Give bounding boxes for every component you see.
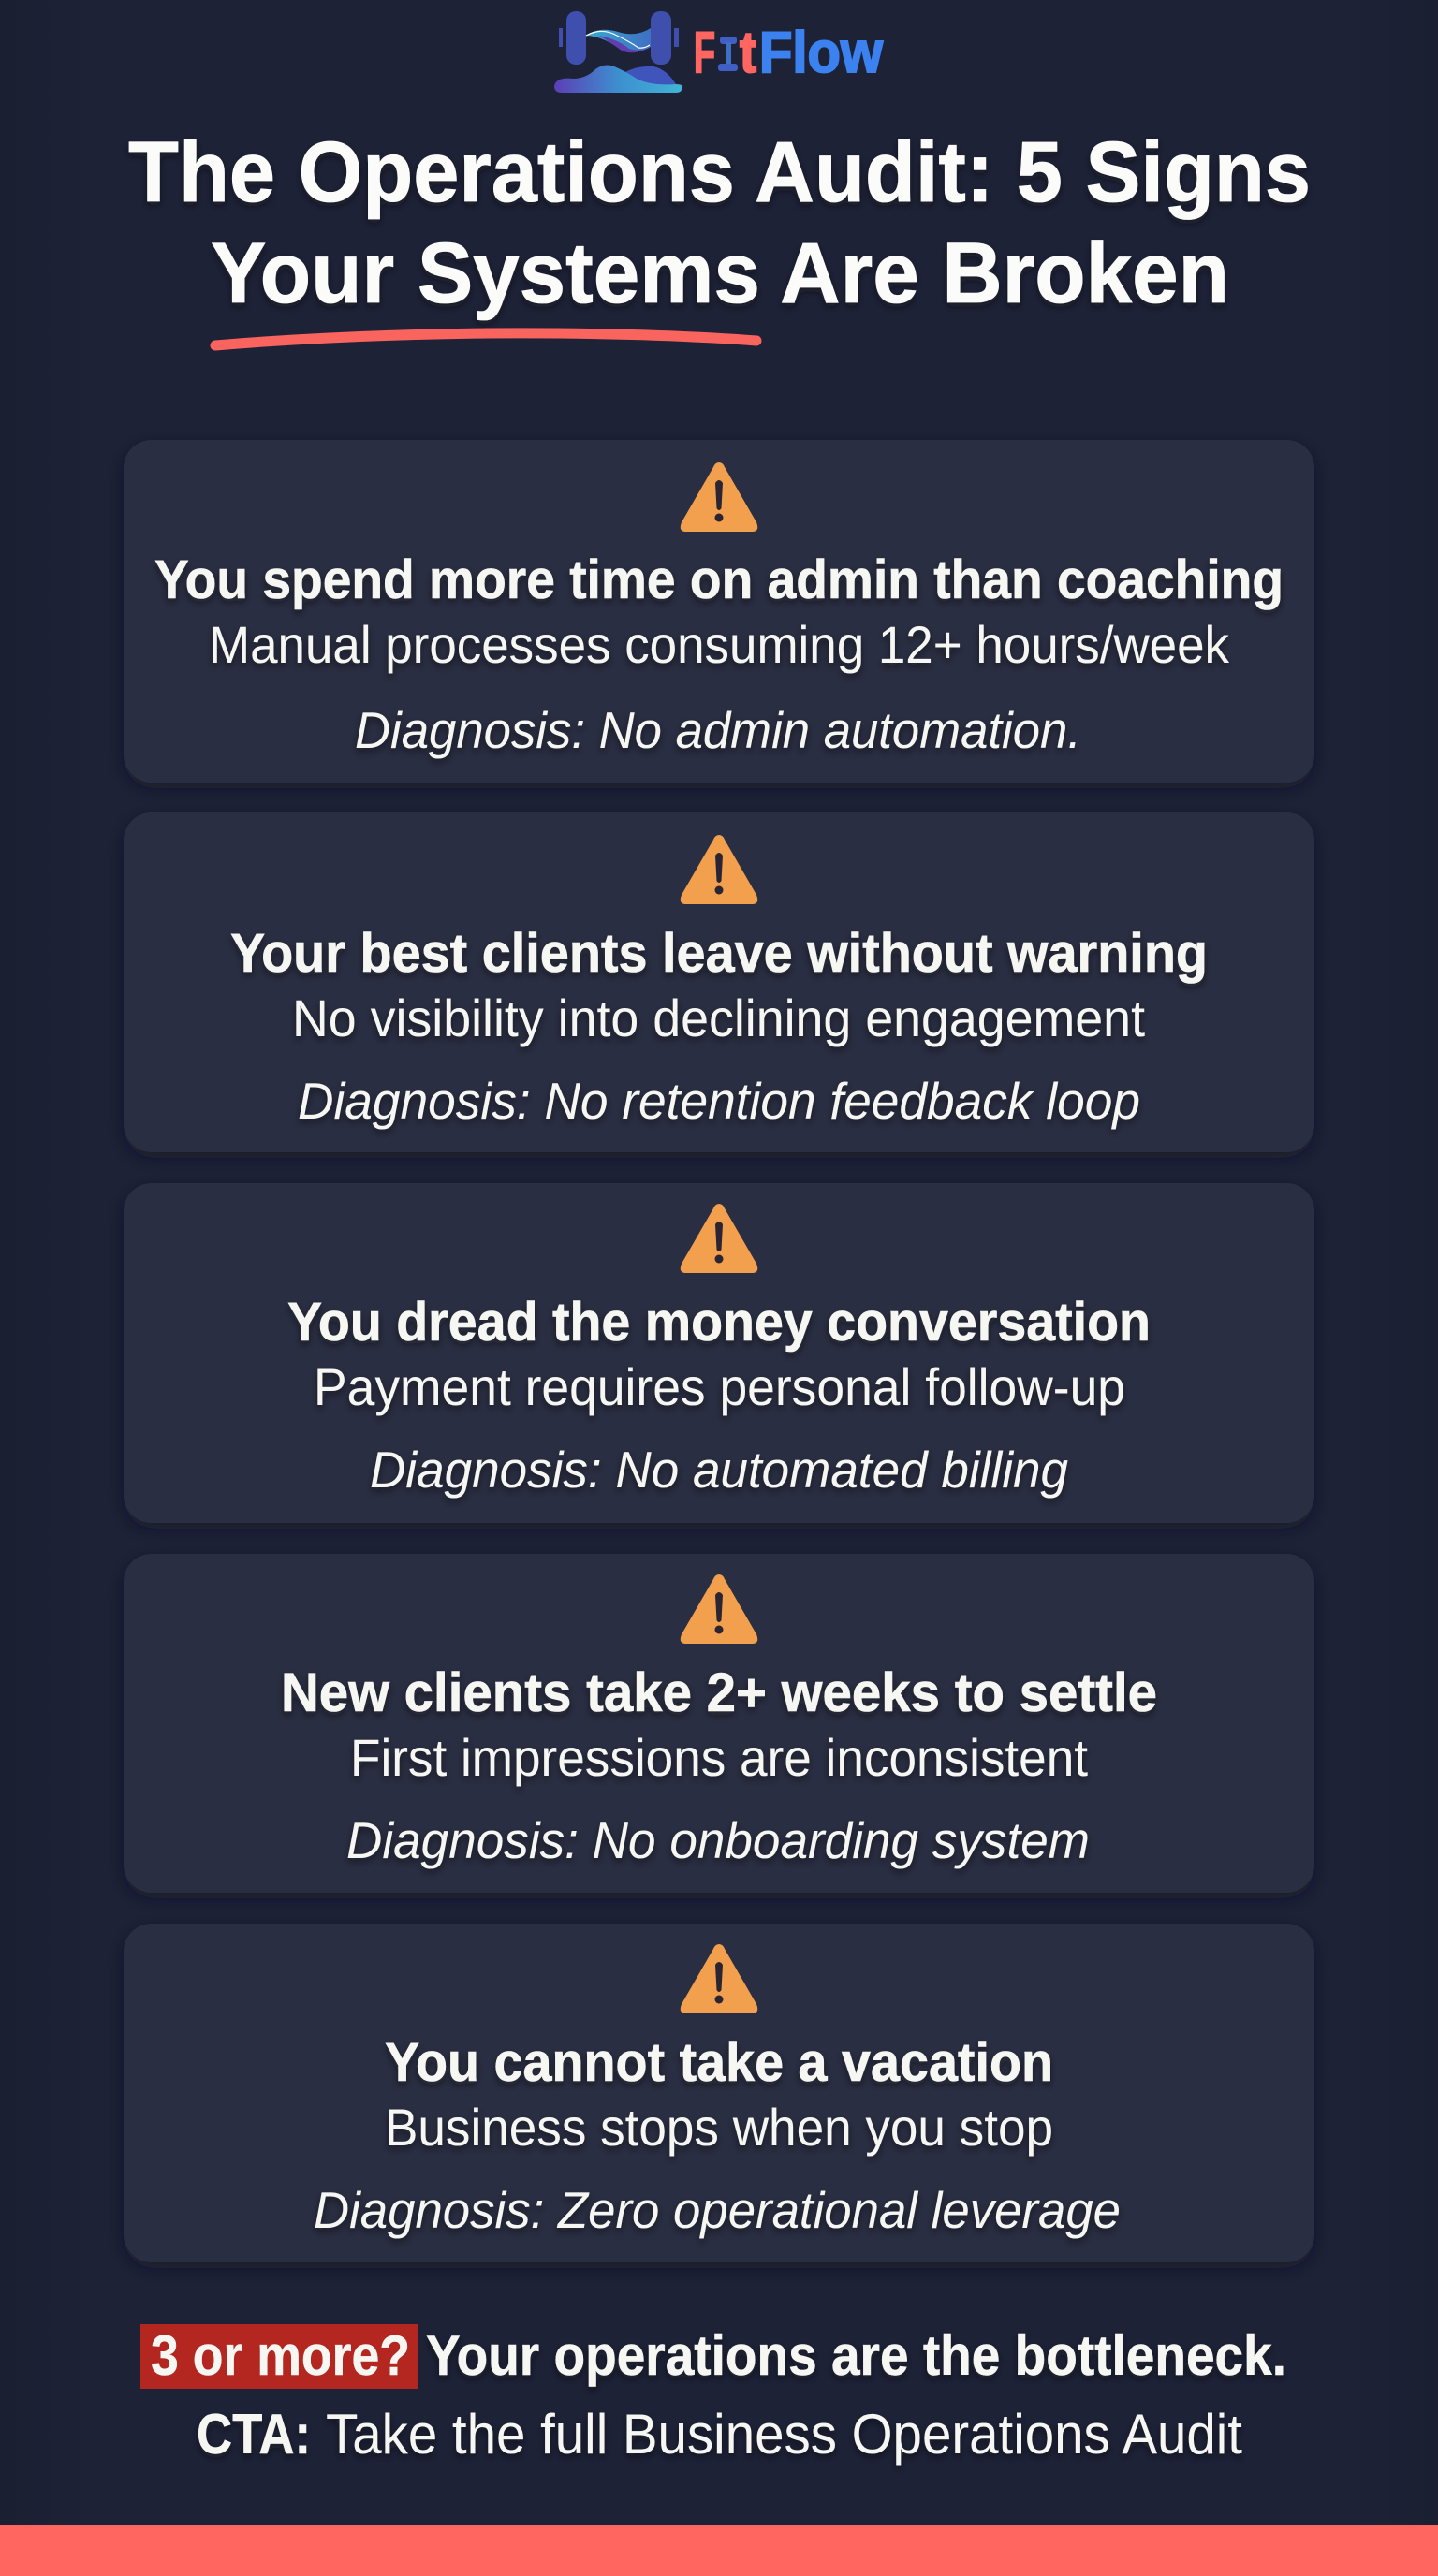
- logo: FitFlow: [554, 11, 884, 93]
- logo wordmark: [694, 21, 884, 85]
- panel: sign 4: [124, 1554, 1314, 1893]
- title: [128, 124, 1311, 321]
- description: sign 2: No visibility into declining engagement: [292, 988, 1145, 1047]
- description: sign 4: First impressions are inconsistent: [350, 1728, 1088, 1787]
- highlight box: [140, 2324, 418, 2389]
- call to action: CTA:: [197, 2403, 311, 2466]
- icon: warning: [681, 1574, 757, 1644]
- heading: sign 1: You spend more time on admin than coaching: [154, 549, 1284, 610]
- panel: sign 3: [124, 1183, 1314, 1523]
- heading: sign 2: Your best clients leave without warning: [230, 923, 1208, 984]
- icon: warning: [681, 1944, 757, 2013]
- panel: sign 5: [124, 1924, 1314, 2262]
- icon: warning: [681, 462, 757, 532]
- icon: warning: [681, 1204, 757, 1273]
- heading: sign 4: New clients take 2+ weeks to settle: [281, 1662, 1157, 1723]
- diagnosis: sign 2: Diagnosis: No retention feedback loop: [298, 1072, 1140, 1130]
- call to action: Take the full Business Operations Audit: [326, 2403, 1242, 2466]
- callout text: Your operations are the bottleneck.: [426, 2324, 1286, 2387]
- diagnosis: sign 4: Diagnosis: No onboarding system: [346, 1811, 1090, 1869]
- icon: dumbbell with wave: [554, 11, 682, 93]
- footer bar: [0, 2525, 1438, 2576]
- diagnosis: sign 3: Diagnosis: No automated billing: [370, 1441, 1068, 1499]
- logo wordmark: F: [694, 21, 715, 85]
- title: The Operations Audit: 5 Signs: [128, 124, 1311, 220]
- description: sign 5: Business stops when you stop: [385, 2098, 1053, 2157]
- panel: sign 1: [124, 440, 1314, 783]
- heading: sign 3: You dread the money conversation: [287, 1292, 1151, 1353]
- highlight text: 3 or more?: [151, 2324, 410, 2387]
- logo wordmark: t: [740, 21, 756, 85]
- diagnosis: sign 5: Diagnosis: Zero operational leverage: [314, 2181, 1121, 2239]
- title underline: [215, 333, 756, 345]
- description: sign 3: Payment requires personal follow-up: [314, 1357, 1125, 1416]
- logo wordmark: Flow: [759, 21, 884, 85]
- title: Your Systems Are Broken: [211, 226, 1229, 321]
- icon: warning: [681, 835, 757, 904]
- diagnosis: sign 1: Diagnosis: No admin automation.: [355, 701, 1081, 759]
- callout: 3 or more: [140, 2324, 1286, 2389]
- panel: sign 2: [124, 812, 1314, 1152]
- heading: sign 5: You cannot take a vacation: [385, 2032, 1053, 2093]
- description: sign 1: Manual processes consuming 12+ hours/week: [209, 615, 1230, 674]
